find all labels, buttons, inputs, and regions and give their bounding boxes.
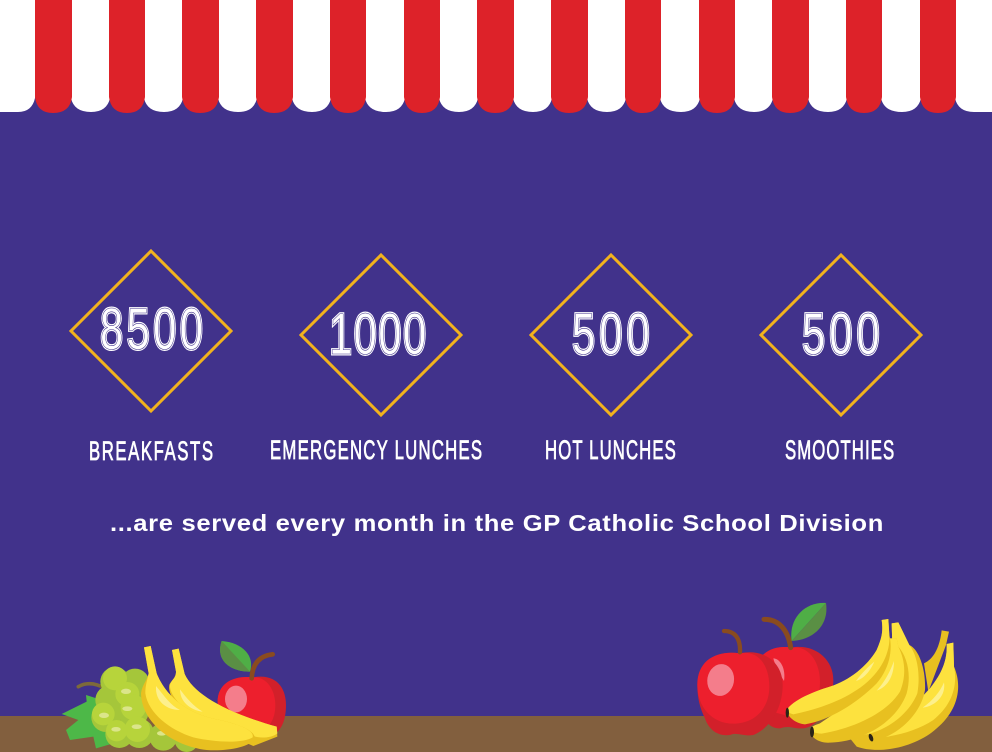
grapes [91, 667, 199, 752]
front apple [697, 631, 783, 735]
stat: 500 smoothies: SMOOTHIES [785, 435, 894, 465]
stat: 500 smoothies: 500 [802, 301, 880, 367]
rear right banana [850, 643, 958, 750]
stat: 500 hot lunches: 500 [572, 301, 650, 367]
back apple [760, 603, 833, 728]
front banana [810, 638, 909, 743]
fruit group left: grapes, bananas, apple [62, 641, 286, 752]
middle banana [855, 622, 925, 742]
stat: 500 hot lunches: HOT LUNCHES [545, 435, 676, 465]
stat: 8500 breakfasts: BREAKFASTS [89, 436, 213, 466]
grape stem [78, 684, 105, 688]
stat: 8500 breakfasts: 8500 [100, 296, 203, 362]
stat: 1000 emergency lunches: EMERGENCY LUNCHES [270, 435, 482, 465]
front banana [141, 646, 255, 750]
back banana [169, 649, 277, 746]
stat: 500 smoothies [761, 255, 921, 465]
banana tips [786, 708, 874, 742]
stat: 1000 emergency lunches [270, 255, 482, 465]
rear banana stem [924, 630, 949, 692]
caption sentence: ...are served every month in the GP Catholic School Division [110, 510, 884, 536]
grape leaves [62, 695, 113, 748]
fruit group right: apples and bananas [697, 603, 958, 750]
small apple [218, 641, 286, 735]
stat: 1000 emergency lunches: 1000 [329, 301, 426, 367]
stat: 8500 breakfasts [71, 251, 231, 466]
stat: 1000 emergency lunches: 1000 [329, 301, 426, 367]
upper banana [787, 619, 891, 724]
awning [0, 0, 992, 113]
stat: 500 hot lunches: 500 [572, 301, 650, 367]
table surface [0, 716, 992, 752]
stat: 500 smoothies: 500 [802, 301, 880, 367]
stat: 8500 breakfasts: 8500 [100, 296, 203, 362]
stat: 500 hot lunches [531, 255, 691, 465]
